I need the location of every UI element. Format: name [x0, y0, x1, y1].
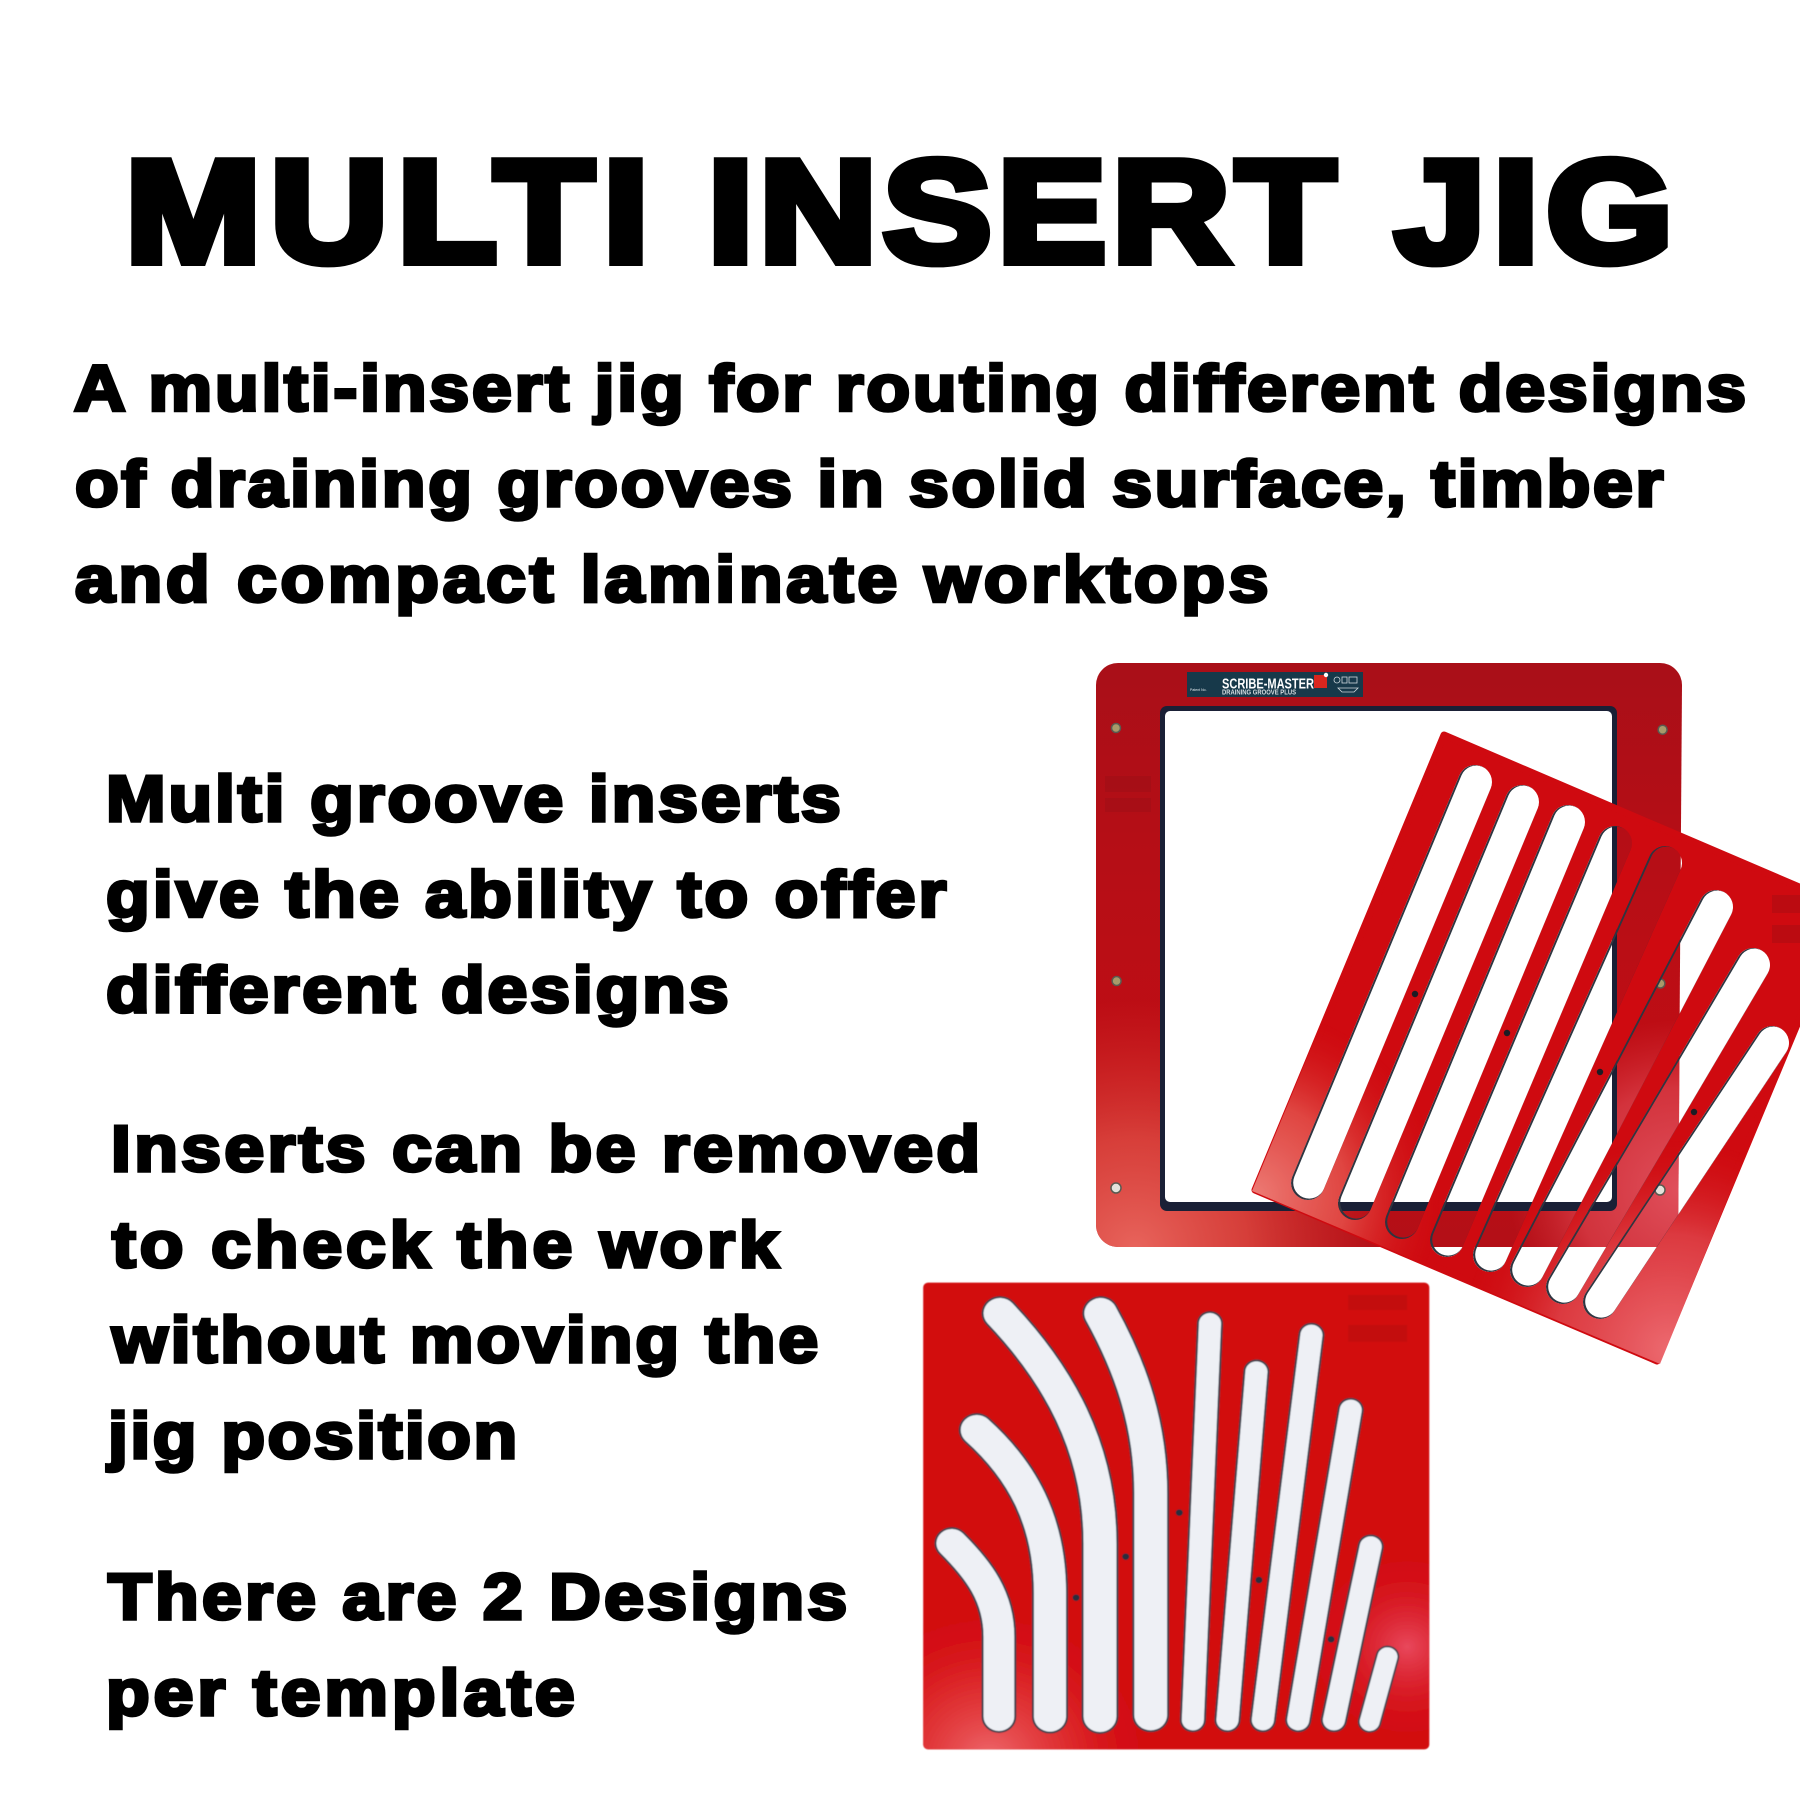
rotated groove insert: [1252, 732, 1800, 1364]
text block: inserts can be removed: to check the work: [112, 1209, 780, 1281]
intro text block: of draining grooves in solid surface, timber: [75, 448, 1663, 520]
groove openings: [952, 1313, 1387, 1722]
title: MULTI: [126, 131, 649, 293]
brand label: Patent No.: [1190, 688, 1207, 692]
text block: multi groove inserts: [106, 763, 946, 1026]
text block: two designs per template: per template: [106, 1657, 575, 1729]
intro text block: A multi-insert jig for routing different designs: [74, 353, 1746, 425]
text block: inserts can be removed: without moving the: [111, 1304, 818, 1376]
title: INSERT: [708, 131, 1335, 293]
insert engraved marks: [1772, 895, 1800, 943]
intro text block: and compact laminate worktops: [75, 543, 1269, 616]
jig with rotated insert: [1096, 663, 1800, 1364]
brand label: [1187, 672, 1363, 697]
text block: inserts can be removed: [106, 1113, 980, 1472]
frame screws: [1111, 724, 1667, 1195]
text block: two designs per template: [106, 1561, 847, 1729]
insert holes: [1412, 991, 1697, 1115]
template holes: [1072, 1509, 1335, 1643]
text block: inserts can be removed: Inserts can be removed: [111, 1113, 980, 1185]
bottom curved-groove template: [923, 1283, 1429, 1749]
title: [126, 131, 1673, 293]
straight grooves: [1193, 1323, 1387, 1722]
brand label: DRAINING GROOVE PLUS: [1222, 687, 1296, 696]
jig frame: [1096, 663, 1682, 1247]
text block: inserts can be removed: jig position: [106, 1400, 517, 1472]
intro text block: [74, 353, 1746, 616]
text block: multi groove inserts: different designs: [106, 954, 729, 1026]
template panel: [923, 1283, 1429, 1749]
text block: multi groove inserts: Multi groove inserts: [106, 763, 841, 835]
curved grooves: [952, 1313, 1151, 1717]
title: JIG: [1395, 131, 1673, 293]
text block: multi groove inserts: give the ability to offer: [106, 858, 946, 931]
text block: two designs per template: There are 2 Designs: [108, 1561, 847, 1633]
engraved marks: [1105, 776, 1151, 812]
brand label: SCRIBE-MASTER: [1222, 676, 1314, 692]
